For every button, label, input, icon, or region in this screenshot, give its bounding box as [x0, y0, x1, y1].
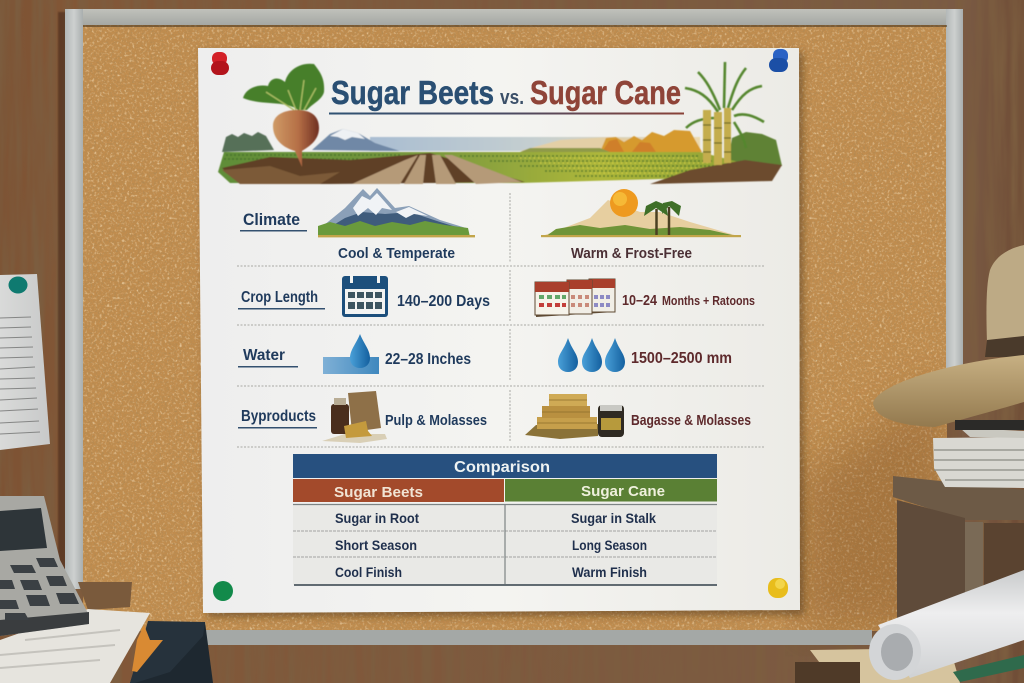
calculator	[0, 496, 89, 636]
text: 1500–2500 mm: 1500–2500 mm	[631, 350, 732, 367]
text: 140–200 days: 140–200 Days	[397, 293, 490, 310]
climate row	[240, 188, 475, 262]
label: water	[238, 347, 298, 368]
stacked papers	[933, 428, 1024, 488]
table rows: Cool Finish	[335, 564, 402, 580]
column head: sugar cane	[505, 479, 717, 502]
cork surface	[83, 25, 947, 631]
desk items right	[795, 245, 1024, 683]
dark book stack	[130, 621, 213, 683]
column head: sugar beets	[293, 479, 504, 502]
icon: water drop on ruler band	[323, 334, 379, 374]
icon: three calendars	[535, 279, 615, 317]
cardboard box	[78, 582, 132, 610]
icon: three water drops	[558, 338, 625, 372]
icon: warm landscape with sun	[541, 189, 741, 237]
sugar cane plant	[685, 62, 764, 165]
text: bagasse & molasses: Bagasse & Molasses	[631, 412, 751, 429]
poster sheet	[198, 48, 804, 617]
icon: snowy mountains	[318, 188, 475, 237]
text: pulp & molasses: Pulp & Molasses	[385, 412, 487, 429]
table rows: Sugar in Root	[335, 510, 419, 526]
title: Sugar Beets	[331, 74, 494, 111]
pin: yellow	[768, 578, 788, 598]
icon: pulp sack and molasses jar	[322, 391, 387, 443]
title: Sugar Cane	[530, 74, 681, 111]
treelines	[222, 130, 782, 166]
table title bar	[293, 454, 717, 478]
wooden cabinet	[893, 476, 1024, 622]
sky and hills	[312, 129, 700, 151]
text: 22–28 inches: 22–28 Inches	[385, 351, 471, 368]
pin: red	[211, 52, 229, 75]
label: byproducts: Byproducts	[241, 408, 316, 425]
push pins	[211, 49, 788, 601]
farm landscape banner	[218, 62, 782, 184]
table rows: Short Season	[335, 537, 417, 553]
pin: green	[213, 581, 233, 601]
title	[329, 74, 684, 114]
text: 10–24 months + ratoons: 10–24	[622, 292, 658, 309]
straw hat	[873, 245, 1024, 430]
rolled blueprint	[795, 570, 1024, 683]
pin: teal	[8, 276, 28, 294]
text: 10–24 months + ratoons	[622, 292, 755, 309]
label: water: Water	[243, 347, 285, 364]
table rows: Warm Finish	[572, 564, 647, 580]
soil and furrows	[222, 153, 782, 184]
icon: calendar	[342, 274, 388, 317]
crop field	[218, 152, 765, 183]
column head: sugar beets: Sugar Beets	[334, 484, 423, 501]
column head: sugar cane: Sugar Cane	[581, 483, 665, 500]
comparison table	[293, 454, 717, 585]
table rows	[293, 504, 717, 585]
label: crop length: Crop Length	[241, 289, 318, 306]
text: warm & frost-free: Warm & Frost-Free	[571, 245, 692, 262]
table rows: Long Season	[572, 537, 647, 553]
label: climate: Climate	[243, 210, 300, 229]
title: vs.	[500, 87, 524, 109]
water row	[238, 334, 471, 374]
pin: blue	[769, 49, 788, 72]
table rows: Sugar in Stalk	[571, 510, 656, 526]
icon: bagasse bales and jar	[525, 394, 624, 439]
pinned note sheet	[0, 274, 50, 450]
text: 10–24 months + ratoons: Months + Ratoons	[662, 293, 755, 308]
byproducts row	[238, 391, 487, 443]
desk items left	[0, 496, 213, 683]
beet plant	[243, 64, 324, 167]
crop length row	[238, 274, 490, 317]
paper stack	[0, 609, 150, 683]
text: cool & temperate: Cool & Temperate	[338, 245, 455, 262]
table title bar: Comparison	[454, 459, 550, 476]
